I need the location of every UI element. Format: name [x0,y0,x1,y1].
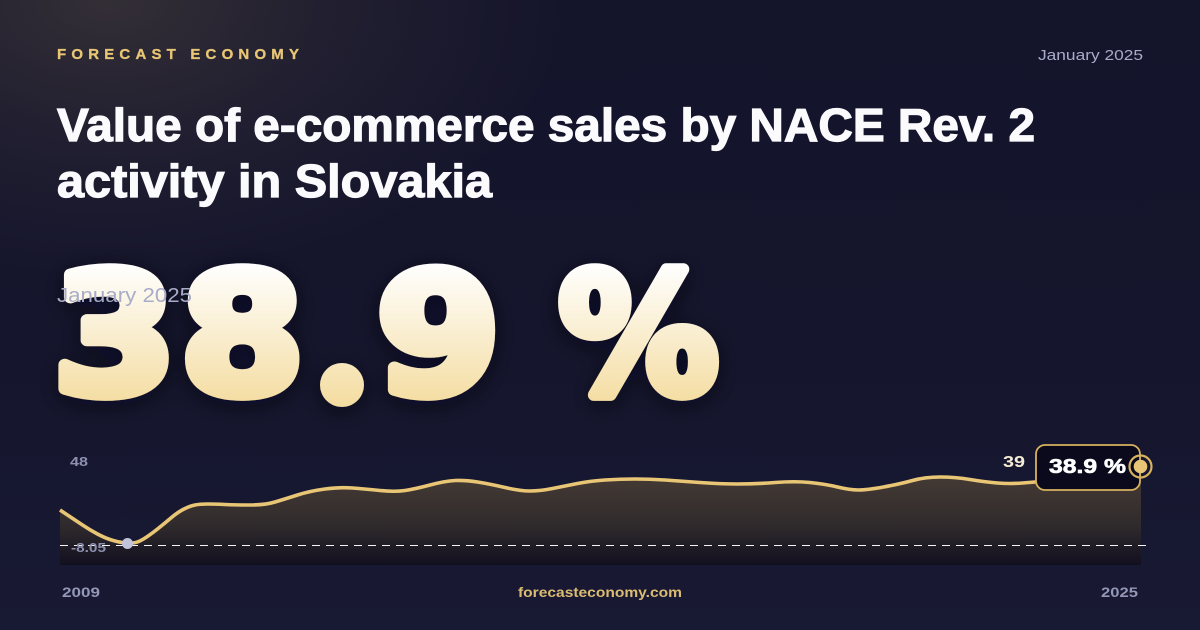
low point marker [122,538,133,549]
website: forecasteconomy.com [518,584,682,600]
end year: 2025 [1101,584,1138,600]
trend line [60,477,1060,543]
value callout: 38.9 % [1049,456,1126,478]
area fill [60,470,1141,565]
latest point marker [1130,456,1152,478]
date label top right: January 2025 [1038,47,1143,64]
title: Value of e-commerce sales by NACE Rev. 2 [57,99,1035,151]
overlapping date label: January 2025 [57,285,192,307]
value callout [1036,445,1140,490]
baseline dashed [60,544,1147,546]
latest rounded label: 39 [1003,454,1025,471]
y-axis min label: -8.05 [71,540,106,555]
title: activity in Slovakia [57,155,492,207]
big value: 9 [377,238,500,432]
title [57,99,1035,207]
big value: % [559,239,718,432]
big value: 38 [53,238,304,432]
start year: 2009 [62,584,100,600]
y-axis max label: 48 [70,454,88,469]
big value [53,238,718,432]
brand label: FORECAST ECONOMY [57,46,299,63]
sparkline chart [60,445,1152,565]
big value: . [319,287,365,426]
